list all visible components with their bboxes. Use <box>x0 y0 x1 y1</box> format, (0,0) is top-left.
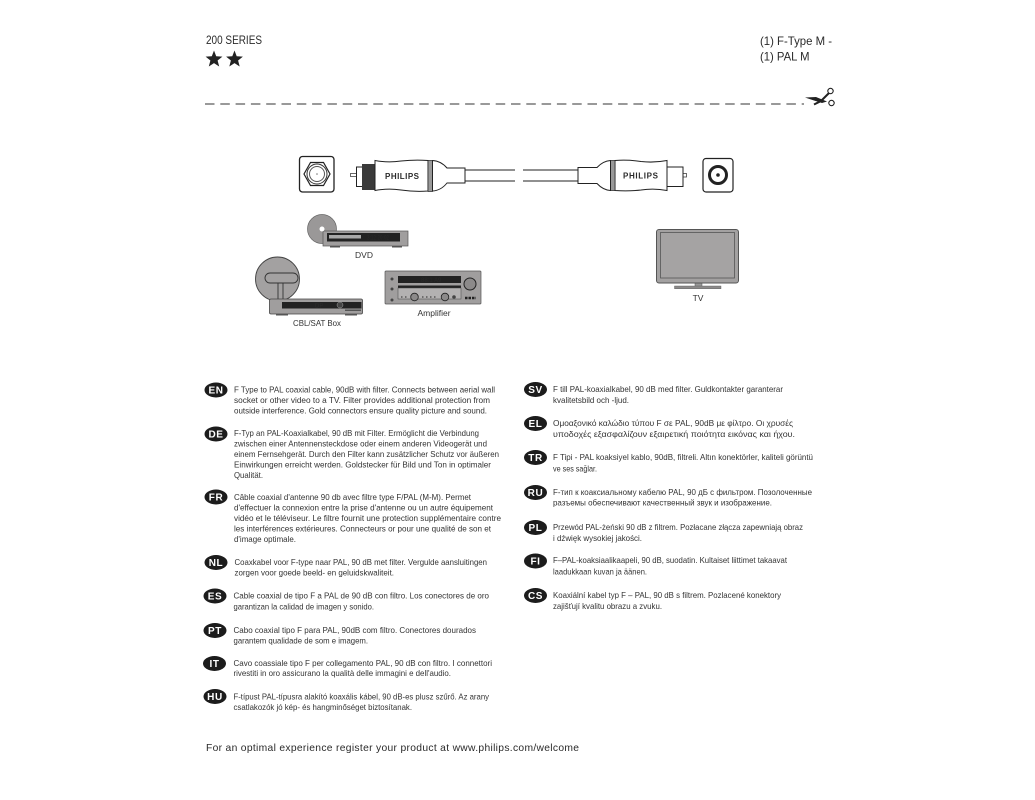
text block: DE: Einwirkungen erreicht werden. Goldstecker für Bild und Ton in optimaler <box>234 460 491 470</box>
text block: IT: rivestiti in oro assicurano la qualità delle immagini e dell'audio. <box>234 668 451 678</box>
text block: EN: EN <box>208 386 224 396</box>
right connector <box>578 160 686 191</box>
text block: HU: csatlakozók jó kép- és hangminőséget biztosítanak. <box>234 702 412 712</box>
text block: ES: ES <box>208 592 222 602</box>
text block: PL: i dźwięk wysokiej jakości. <box>553 533 642 543</box>
text block: TR: TR <box>528 453 543 464</box>
right connector: PHILIPS <box>623 172 659 180</box>
text block: DE: DE <box>208 430 224 440</box>
text block: EN: outside interference. Gold connectors ensure quality picture and sound. <box>234 406 487 416</box>
text block: CS <box>524 588 782 611</box>
text block: ES: garantizan la calidad de imagen y sonido. <box>234 602 374 612</box>
label: Amplifier: Amplifier <box>417 308 451 318</box>
panel: right language column <box>524 382 813 611</box>
text block: EN <box>204 382 495 416</box>
icon: DVD player: 3:12:20:02 <box>367 234 389 242</box>
icon: amplifier <box>385 271 481 304</box>
text block: SV <box>524 382 783 405</box>
text block: RU <box>524 485 812 508</box>
icon: PAL wall socket <box>703 158 733 192</box>
text block: DE <box>204 426 499 480</box>
panel: left language column <box>203 382 501 712</box>
text block: EL: υποδοχές εξασφαλίζουν εξαιρετική ποιότητα εικόνας και ήχου. <box>553 429 795 439</box>
text block: ES <box>204 588 489 612</box>
label: DVD: DVD <box>355 250 373 260</box>
icon: scissors <box>805 88 834 106</box>
text block: DE: F-Typ an PAL-Koaxialkabel, 90 dB mit Filter. Ermöglicht die Verbindung <box>234 428 479 438</box>
icon: satellite dish and CBL/SAT box: DP <box>315 304 323 310</box>
label: CBL/SAT Box: CBL/SAT Box <box>293 318 342 328</box>
text block: TR: ve ses sağlar. <box>553 464 597 474</box>
text block: FI: laadukkaan kuvan ja äänen. <box>553 566 647 576</box>
text block: RU: F-тип к коаксиальному кабелю PAL, 90 дБ с фильтром. Позолоченные <box>553 487 812 497</box>
text block: FR: FR <box>209 492 223 504</box>
text block: FI: FI <box>530 556 541 568</box>
text block: FR: d'image optimale. <box>234 534 296 544</box>
text block: FR: vidéo et le téléviseur. Le filtre fournit une protection supplémentaire contre <box>234 513 501 523</box>
icon: DVD player <box>308 214 408 248</box>
text block: SV: kvalitetsbild och -ljud. <box>553 395 629 405</box>
text block: HU <box>204 689 490 712</box>
text block: EL <box>524 416 795 439</box>
text block: DE: Qualität. <box>234 470 263 480</box>
text block: NL: Coaxkabel voor F-type naar PAL, 90 dB met filter. Vergulde aansluitingen <box>234 557 487 567</box>
text block: CS: CS <box>528 591 543 602</box>
icon: satellite dish and CBL/SAT box <box>256 257 362 316</box>
text block: DE: zwischen einer Antennensteckdose oder einem anderen Videogerät und <box>234 438 487 448</box>
left connector <box>350 160 465 192</box>
text block: DE: einem Fernsehgerät. Durch den Filter kann zusätzlicher Schutz vor äußeren <box>234 449 499 459</box>
text block: CS: zajišťují kvalitu obrazu a zvuku. <box>553 601 662 611</box>
text block: PL <box>524 520 803 543</box>
text block: PL: PL <box>529 523 542 534</box>
text block: NL <box>204 555 487 578</box>
cable <box>465 170 578 181</box>
text block: RU: разъемы обеспечивают качественный звук и изображение. <box>553 498 772 508</box>
text block: PT: garantem qualidade de som e imagem. <box>234 636 368 646</box>
icon: cable with connectors <box>350 160 686 192</box>
text block: HU: F-típust PAL-típusra alakító koaxális kábel, 90 dB-es plusz szűrő. Az arany <box>234 692 490 702</box>
text block: NL: NL <box>209 558 223 569</box>
text block: FR: Câble coaxial d'antenne 90 db avec filtre type F/PAL (M-M). Permet <box>234 492 472 502</box>
text block: SV: SV <box>528 385 543 396</box>
text block: EL: Ομοαξονικό καλώδιο τύπου F σε PAL, 90dB με φίλτρο. Οι χρυσές <box>553 418 793 428</box>
text block: RU: RU <box>528 488 543 499</box>
text block: FR <box>204 490 501 544</box>
text block: PT <box>204 623 476 646</box>
heading: 200 series: 200 SERIES <box>206 33 262 47</box>
text block: FI <box>524 554 788 576</box>
text block: NL: zorgen voor goede beeld- en geluidskwaliteit. <box>234 568 394 578</box>
text block: EL: EL <box>529 419 542 430</box>
label: TV: TV <box>693 293 704 303</box>
icon: F-type wall socket <box>300 156 334 192</box>
text block: FR: les interférences extérieures. Connecteurs or pour une qualité de son et <box>234 524 492 534</box>
text block: IT: IT <box>209 659 220 670</box>
icon: two stars <box>206 50 243 66</box>
text block: TR <box>524 450 813 474</box>
text block: FI: F–PAL-koaksiaalikaapeli, 90 dB, suodatin. Kultaiset liittimet takaavat <box>553 555 788 565</box>
package contents: (1) F-Type M - <box>760 34 832 48</box>
text block: ES: Cable coaxial de tipo F a PAL de 90 dB con filtro. Los conectores de oro <box>234 590 489 600</box>
text block: IT: Cavo coassiale tipo F per collegamento PAL, 90 dB con filtro. I connettori <box>234 658 492 668</box>
footer: registration note: For an optimal experience register your product at www.philips.com/welcome <box>206 743 579 754</box>
text block: SV: F till PAL-koaxialkabel, 90 dB med filter. Guldkontakter garanterar <box>553 384 783 394</box>
text block: FR: d'effectuer la connexion entre la prise d'antenne ou un autre équipement <box>234 502 494 512</box>
icon: TV <box>656 230 738 289</box>
text block: PT: Cabo coaxial tipo F para PAL, 90dB com filtro. Conectores dourados <box>234 625 476 635</box>
text block: EN: socket or other video to a TV. Filter provides additional protection from <box>234 395 490 405</box>
text block: PL: Przewód PAL-żeński 90 dB z filtrem. Pozłacane złącza zapewniają obraz <box>553 522 803 532</box>
text block: EN: F Type to PAL coaxial cable, 90dB with filter. Connects between aerial wall <box>234 384 495 394</box>
text block: IT <box>203 656 492 678</box>
text block: TR: F Tipi - PAL koaksiyel kablo, 90dB, filtreli. Altın konektörler, kaliteli görüntü <box>553 452 813 462</box>
text block: CS: Koaxiální kabel typ F – PAL, 90 dB s filtrem. Pozlacené konektory <box>553 590 782 600</box>
text block: HU: HU <box>207 692 223 703</box>
icon: amplifier: 88:1 A9 <box>421 278 442 284</box>
left connector: PHILIPS <box>385 172 420 181</box>
package contents: (1) PAL M <box>760 50 810 64</box>
package contents <box>760 34 832 64</box>
text block: PT: PT <box>208 626 222 637</box>
